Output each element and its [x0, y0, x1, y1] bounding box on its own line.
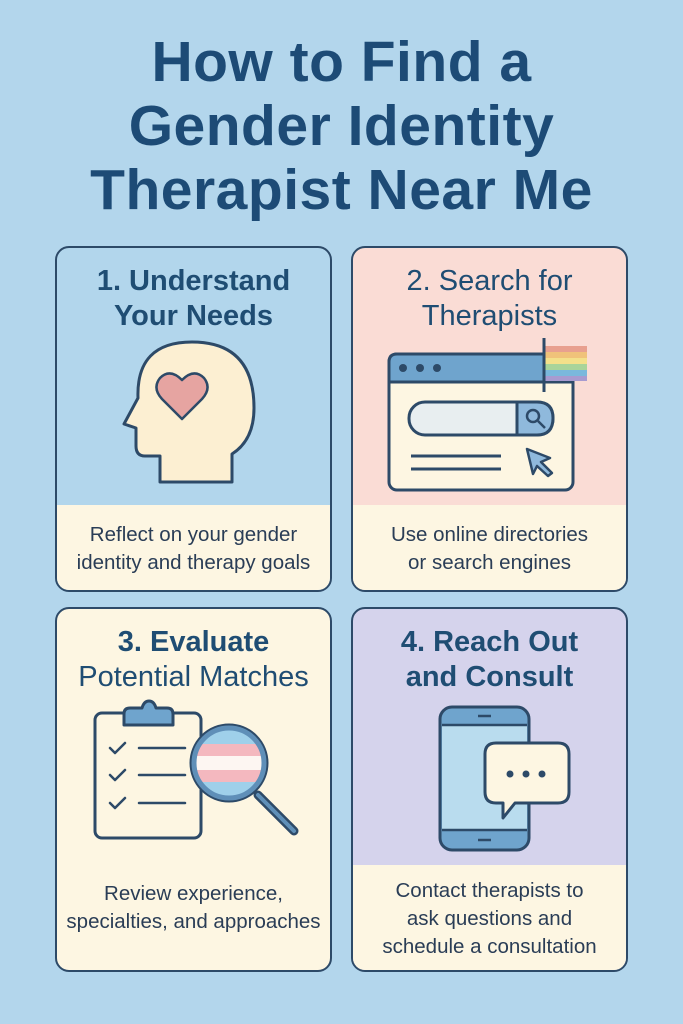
body 1 — [77, 523, 310, 574]
body 4: schedule a consultation — [382, 935, 597, 958]
icon: clipboard with magnifier — [95, 701, 294, 838]
body 4 — [382, 879, 597, 958]
icon: browser search — [389, 354, 573, 490]
icon: phone with speech bubble — [440, 707, 569, 850]
panel: step 2 — [351, 246, 628, 592]
heading 1: 1. Understand — [97, 265, 290, 297]
heading 2: Therapists — [422, 300, 557, 332]
heading 1 — [97, 265, 290, 332]
body 2: Use online directories — [391, 523, 588, 546]
heading 2: 2. Search for — [406, 265, 573, 297]
body 1: identity and therapy goals — [77, 551, 310, 574]
panel: step 4 — [351, 607, 628, 972]
heading 4: and Consult — [406, 661, 573, 693]
heading 3: Potential Matches — [78, 661, 309, 693]
text band 1 — [57, 505, 330, 590]
body 4: ask questions and — [407, 907, 572, 930]
body 1: Reflect on your gender — [90, 523, 297, 546]
body 2 — [391, 523, 588, 574]
body 2: or search engines — [408, 551, 571, 574]
text band 4 — [353, 865, 626, 970]
panel: step 1 — [55, 246, 332, 592]
heading 3: 3. Evaluate — [118, 626, 269, 658]
title: Gender Identity — [129, 94, 554, 158]
title — [90, 30, 593, 222]
panel: step 3 — [55, 607, 332, 972]
heading 2 — [406, 265, 573, 332]
body 3 — [66, 882, 321, 933]
heading 3 — [78, 626, 309, 693]
title: How to Find a — [151, 30, 532, 94]
body 4: Contact therapists to — [395, 879, 584, 902]
heading 4: 4. Reach Out — [401, 626, 578, 658]
body 3: Review experience, — [104, 882, 283, 905]
icon: rainbow flag — [544, 338, 587, 392]
heading 4 — [401, 626, 578, 693]
icon: head with heart — [124, 342, 254, 482]
heading 1: Your Needs — [114, 300, 273, 332]
text band 2 — [353, 505, 626, 590]
title: Therapist Near Me — [90, 158, 593, 222]
body 3: specialties, and approaches — [66, 910, 321, 933]
